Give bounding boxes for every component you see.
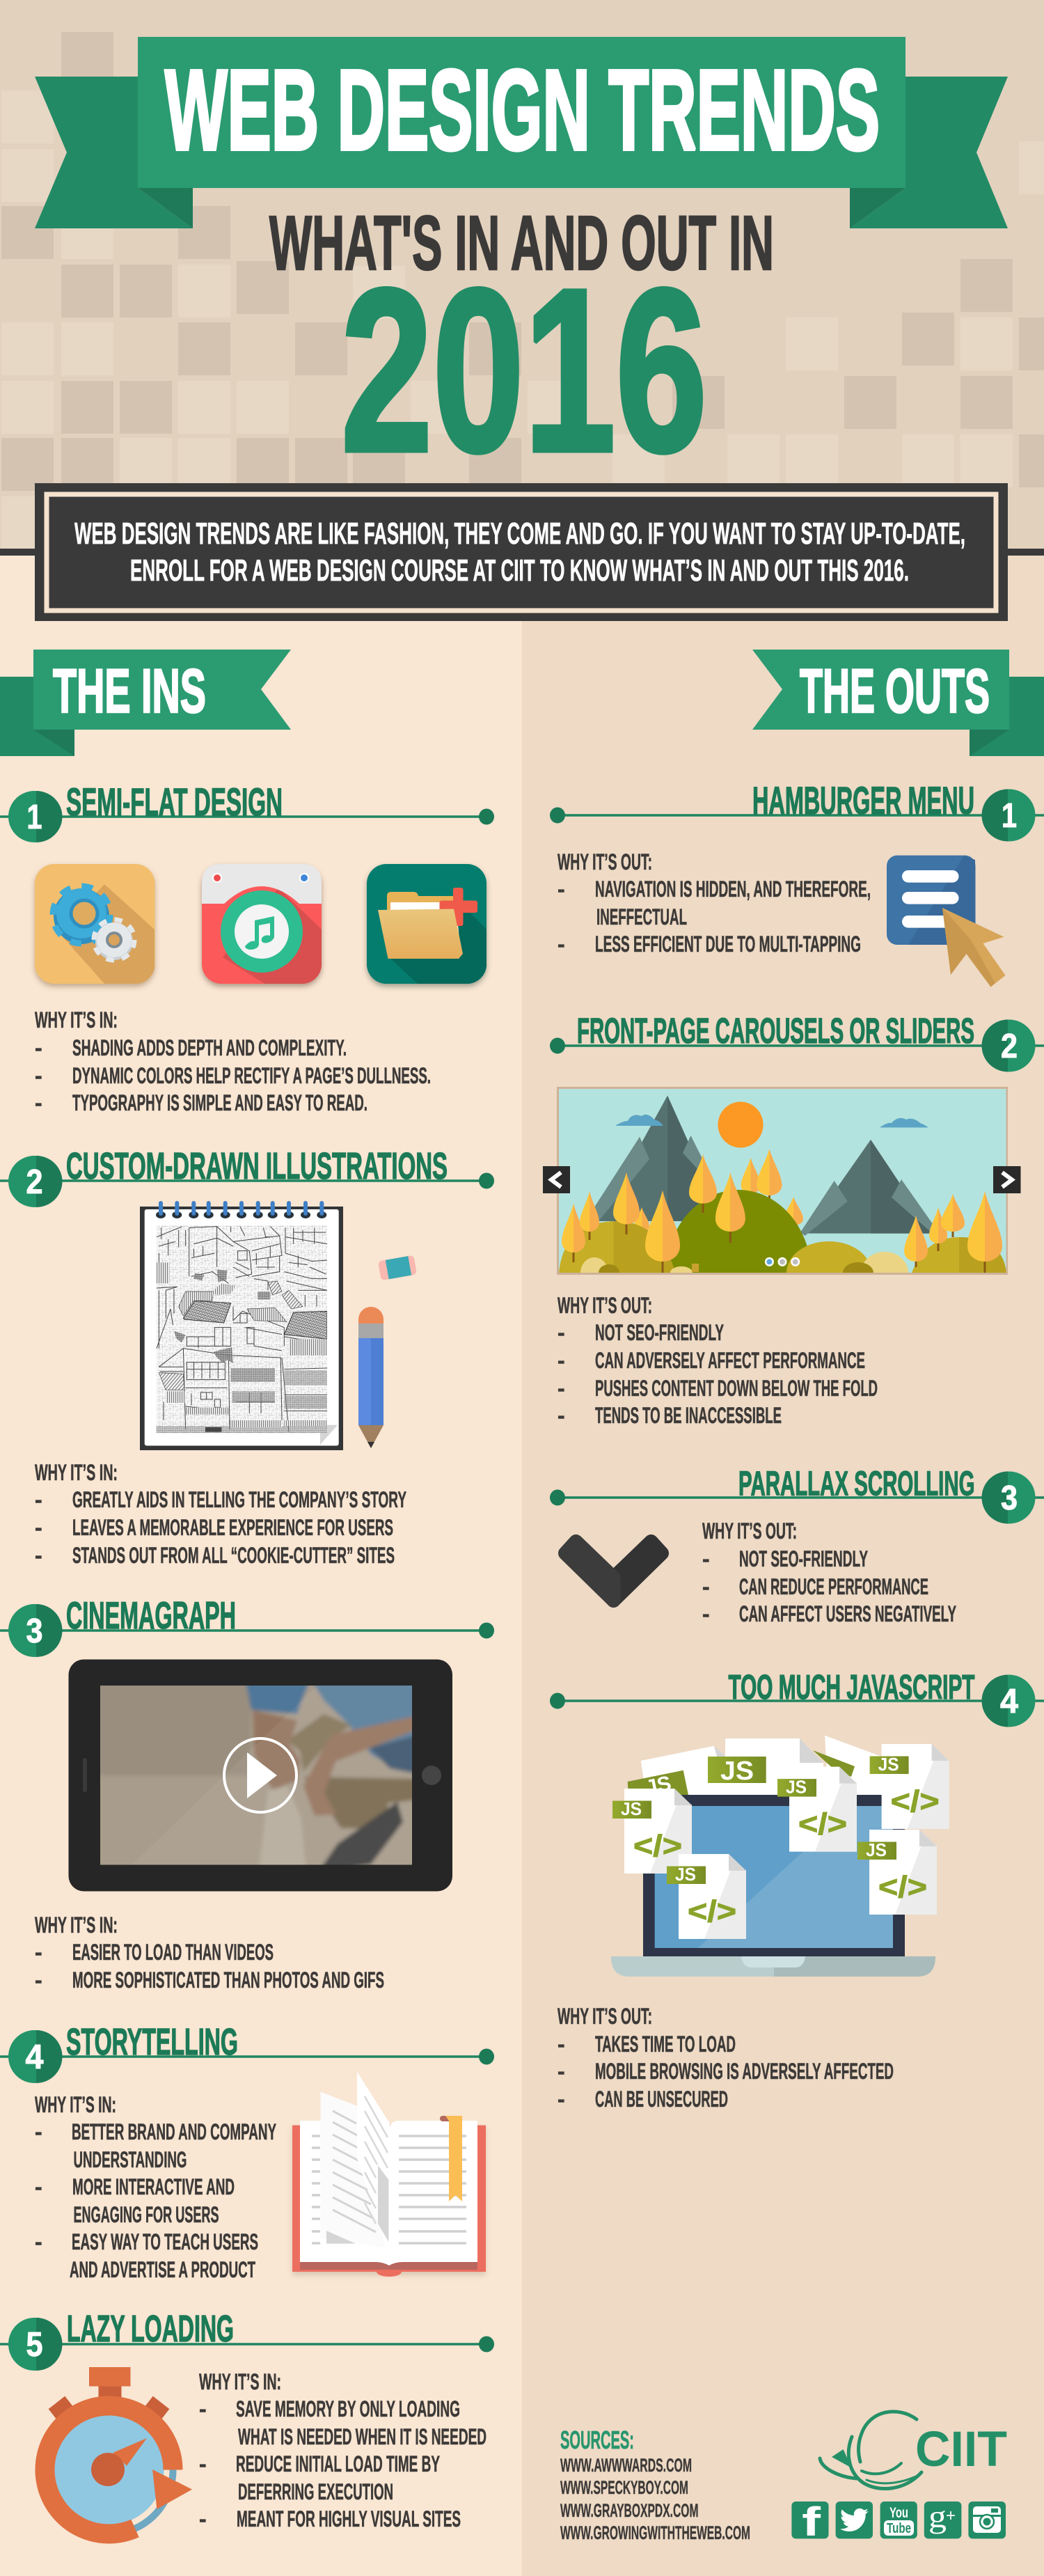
icon: gears — [35, 864, 155, 987]
js file 2: </> — [688, 1894, 736, 1929]
arrow: slider next — [993, 1166, 1020, 1193]
video still — [100, 1686, 412, 1864]
heading: parallax scrolling: 3 — [1001, 1479, 1018, 1517]
text block: why it's in: SHADING ADDS DEPTH AND COMPLEXITY. — [72, 1035, 347, 1060]
text block: why it's out: NOT SEO-FRIENDLY — [595, 1320, 724, 1345]
sources: WWW.AWWWARDS.COM — [560, 2455, 692, 2476]
text block: why it's in: UNDERSTANDING — [74, 2147, 187, 2172]
back files — [628, 1736, 882, 1800]
panel: in 1 semi-flat design — [0, 780, 494, 1115]
text block: why it's out: - — [702, 1546, 710, 1571]
panel: out 3 parallax scrolling — [550, 1465, 1044, 1626]
text block: why it's in: DEFERRING EXECUTION — [238, 2479, 393, 2504]
heading: lazy loading — [0, 2308, 494, 2371]
back files: JS — [720, 1757, 754, 1786]
social icons — [791, 2499, 1006, 2545]
js file 5: </> — [878, 1870, 927, 1904]
text block: why it's in: - — [35, 2119, 42, 2144]
text block: why it's in — [35, 1007, 431, 1115]
illustration: sketchbook — [140, 1203, 343, 1450]
text block: why it's out: - — [557, 2087, 565, 2112]
text block: why it's out: CAN ADVERSELY AFFECT PERFORMANCE — [595, 1348, 865, 1373]
sources: WWW.SPECKYBOY.COM — [560, 2477, 688, 2498]
text block: why it's out: WHY IT’S OUT: — [557, 2004, 652, 2029]
text block: why it's out: - — [557, 932, 565, 957]
year 2016: 2016 — [341, 241, 707, 500]
icon: youtube: You — [889, 2505, 908, 2521]
text block: why it's in: - — [35, 1090, 42, 1115]
text block: why it's in: - — [35, 1543, 42, 1568]
text block: why it's out — [557, 849, 871, 957]
icon: hamburger menu with cursor — [887, 856, 1005, 987]
slider dots — [765, 1257, 800, 1266]
icon: facebook — [791, 2499, 828, 2545]
text block: why it's in: EASY WAY TO TEACH USERS — [72, 2229, 258, 2254]
text block: why it's in: - — [35, 2174, 42, 2199]
arrow: slider previous — [543, 1166, 570, 1193]
icon: youtube — [880, 2502, 917, 2538]
text block: why it's in: - — [35, 1035, 42, 1060]
panel: out 1 hamburger menu — [550, 778, 1044, 987]
text block: why it's in: - — [199, 2451, 207, 2476]
sources: WWW.GROWINGWITHTHEWEB.COM — [560, 2522, 750, 2543]
heading: hamburger menu: 1 — [1002, 797, 1017, 835]
text block: why it's in: AND ADVERTISE A PRODUCT — [70, 2257, 255, 2282]
ribbon: the ins: THE INS — [53, 656, 206, 725]
text block: why it's in: - — [35, 1515, 42, 1540]
icon: instagram — [968, 2502, 1006, 2538]
icon: facebook: f — [802, 2499, 821, 2545]
text block: why it's in: - — [35, 1940, 42, 1965]
text block: why it's in: LEAVES A MEMORABLE EXPERIENCE FOR USERS — [72, 1515, 393, 1540]
js file 2: JS — [675, 1864, 696, 1885]
text block: why it's in: MORE SOPHISTICATED THAN PHOTOS AND GIFS — [72, 1968, 384, 1993]
text block: why it's out — [557, 1293, 878, 1428]
illustration: laptop with js files — [611, 1736, 949, 1977]
js file 3: JS — [786, 1777, 807, 1798]
text block: why it's out: - — [557, 877, 565, 902]
title ribbon — [35, 37, 1008, 228]
text block: why it's in — [35, 1460, 406, 1568]
text block: why it's out: - — [557, 1320, 565, 1345]
text block: why it's in: DYNAMIC COLORS HELP RECTIFY A PAGE’S DULLNESS. — [72, 1063, 431, 1088]
js file 1: JS — [621, 1798, 642, 1819]
heading: too much javascript: 4 — [1000, 1683, 1018, 1720]
text block: why it's in: - — [199, 2506, 207, 2531]
panel: in 5 lazy loading — [0, 2308, 494, 2534]
text block: why it's out: WHY IT’S OUT: — [557, 1293, 652, 1318]
text block: why it's in: WHY IT’S IN: — [35, 1007, 118, 1032]
panel: in 3 cinemagraph — [0, 1594, 494, 1993]
panel: in 4 storytelling — [0, 2021, 494, 2282]
text block: why it's in: SAVE MEMORY BY ONLY LOADING — [236, 2396, 460, 2421]
laptop — [611, 1795, 935, 1977]
heading: cinemagraph — [0, 1594, 494, 1657]
text block: why it's in: MORE INTERACTIVE AND — [72, 2174, 235, 2199]
icon: stopwatch — [45, 2367, 192, 2534]
js file 1: </> — [633, 1829, 682, 1863]
heading: storytelling: STORYTELLING — [66, 2021, 238, 2063]
heading: semi-flat design: 1 — [26, 799, 42, 836]
heading: front-page carousels or sliders: 2 — [1001, 1028, 1018, 1065]
text block: why it's in — [35, 2092, 276, 2282]
logo: ciit: CIIT — [915, 2422, 1007, 2477]
text block: why it's in: REDUCE INITIAL LOAD TIME BY — [236, 2451, 440, 2476]
text block: why it's in: STANDS OUT FROM ALL “COOKIE-CUTTER” SITES — [72, 1543, 395, 1568]
sources — [560, 2426, 750, 2543]
heading: front-page carousels or sliders — [550, 1011, 1044, 1072]
logo: ciit — [820, 2412, 1007, 2489]
text block: why it's out: INEFFECTUAL — [596, 904, 687, 929]
back files: JS — [644, 1772, 673, 1800]
intro box — [35, 483, 1008, 621]
text block: why it's in: EASIER TO LOAD THAN VIDEOS — [72, 1940, 274, 1965]
text block: why it's in: - — [35, 2229, 42, 2254]
heading: too much javascript — [550, 1669, 1044, 1727]
text block: why it's in: WHAT IS NEEDED WHEN IT IS NEEDED — [238, 2424, 487, 2449]
text block: why it's in: TYPOGRAPHY IS SIMPLE AND EASY TO READ. — [72, 1090, 367, 1115]
js file 5 — [857, 1830, 937, 1915]
text block: why it's in: BETTER BRAND AND COMPANY — [72, 2119, 276, 2144]
js file 5: JS — [866, 1839, 887, 1860]
text block: why it's out: - — [557, 2032, 565, 2057]
icon: pencil — [358, 1307, 383, 1448]
icon: youtube: Tube — [887, 2521, 911, 2536]
icon: music camera — [202, 864, 322, 987]
js file 1 — [612, 1789, 692, 1874]
js file 3: </> — [798, 1807, 847, 1841]
panel: in 2 custom-drawn illustrations — [0, 1145, 494, 1568]
text block: why it's out: - — [557, 1348, 565, 1373]
text block: why it's in — [199, 2369, 487, 2531]
icon: folder with plus — [367, 864, 487, 987]
heading: custom-drawn illustrations: CUSTOM-DRAWN ILLUSTRATIONS — [66, 1145, 448, 1187]
sources: SOURCES: — [560, 2426, 634, 2454]
text block: why it's out: - — [702, 1574, 710, 1599]
icon: google plus: g — [928, 2499, 947, 2534]
text block: why it's out: CAN BE UNSECURED — [595, 2087, 728, 2112]
heading: lazy loading: LAZY LOADING — [67, 2308, 234, 2350]
icon: google plus: + — [946, 2506, 956, 2525]
text block: why it's in: - — [35, 1487, 42, 1512]
text block: why it's out: WHY IT’S OUT: — [557, 849, 652, 874]
spiral binding — [156, 1203, 326, 1218]
heading: semi-flat design: SEMI-FLAT DESIGN — [66, 780, 283, 824]
heading: hamburger menu — [550, 778, 1044, 841]
ribbon: the outs — [752, 650, 1044, 756]
text block: why it's in: GREATLY AIDS IN TELLING THE COMPANY’S STORY — [72, 1487, 406, 1512]
ribbon: the ins — [0, 650, 291, 756]
text block: why it's out: LESS EFFICIENT DUE TO MULTI-TAPPING — [595, 932, 861, 957]
text block: why it's out: WHY IT’S OUT: — [702, 1518, 797, 1544]
illustration: tablet with video — [68, 1659, 452, 1891]
icon: down chevron — [565, 1541, 662, 1601]
text block: why it's in: MEANT FOR HIGHLY VISUAL SITES — [237, 2506, 461, 2531]
text block: why it's in: - — [35, 1063, 42, 1088]
icon: eraser — [378, 1255, 417, 1280]
sources: WWW.GRAYBOXPDX.COM — [560, 2500, 699, 2521]
text block: why it's out: - — [702, 1601, 710, 1626]
text block: why it's out — [702, 1518, 956, 1626]
text block: why it's in: WHY IT’S IN: — [35, 1460, 118, 1485]
heading: semi-flat design — [0, 780, 494, 842]
heading: storytelling: 4 — [25, 2039, 43, 2076]
heading: cinemagraph: CINEMAGRAPH — [66, 1594, 236, 1637]
text block: why it's out: - — [557, 1376, 565, 1401]
text block: why it's in: WHY IT’S IN: — [199, 2369, 281, 2394]
text block: why it's out: - — [557, 2059, 565, 2084]
js file 4: JS — [878, 1754, 899, 1775]
text block: why it's out: NOT SEO-FRIENDLY — [739, 1546, 868, 1571]
panel: out 2 carousels and sliders — [543, 1011, 1044, 1428]
text block: why it's in: - — [199, 2396, 207, 2421]
js file 3 — [777, 1767, 857, 1852]
heading: custom-drawn illustrations: 2 — [26, 1163, 43, 1201]
text block: why it's in: - — [35, 1968, 42, 1993]
js file 4 — [870, 1744, 949, 1829]
sketch drawing — [156, 1225, 327, 1433]
text block: why it's in: ENGAGING FOR USERS — [74, 2202, 219, 2227]
heading: cinemagraph: 3 — [26, 1612, 43, 1650]
heading: storytelling — [0, 2021, 494, 2083]
panel: out 4 too much javascript — [550, 1669, 1044, 2112]
icon: twitter — [836, 2502, 873, 2538]
text block: why it's out — [557, 2004, 894, 2112]
heading: parallax scrolling — [550, 1465, 1044, 1523]
text block: why it's in: WHY IT’S IN: — [35, 2092, 116, 2117]
illustration: carousel landscape — [543, 1087, 1020, 1275]
icon: google plus — [924, 2499, 961, 2538]
text block: why it's in — [35, 1913, 384, 1993]
text block: why it's out: TENDS TO BE INACCESSIBLE — [595, 1403, 782, 1428]
text block: why it's in: WHY IT’S IN: — [35, 1913, 118, 1938]
heading: custom-drawn illustrations — [0, 1145, 494, 1207]
js file 2 — [667, 1854, 746, 1939]
text block: why it's out: - — [557, 1403, 565, 1428]
js file 4: </> — [891, 1784, 940, 1819]
text block: why it's out: TAKES TIME TO LOAD — [595, 2032, 736, 2057]
icon: open book — [292, 2072, 486, 2277]
heading: lazy loading: 5 — [26, 2326, 43, 2364]
